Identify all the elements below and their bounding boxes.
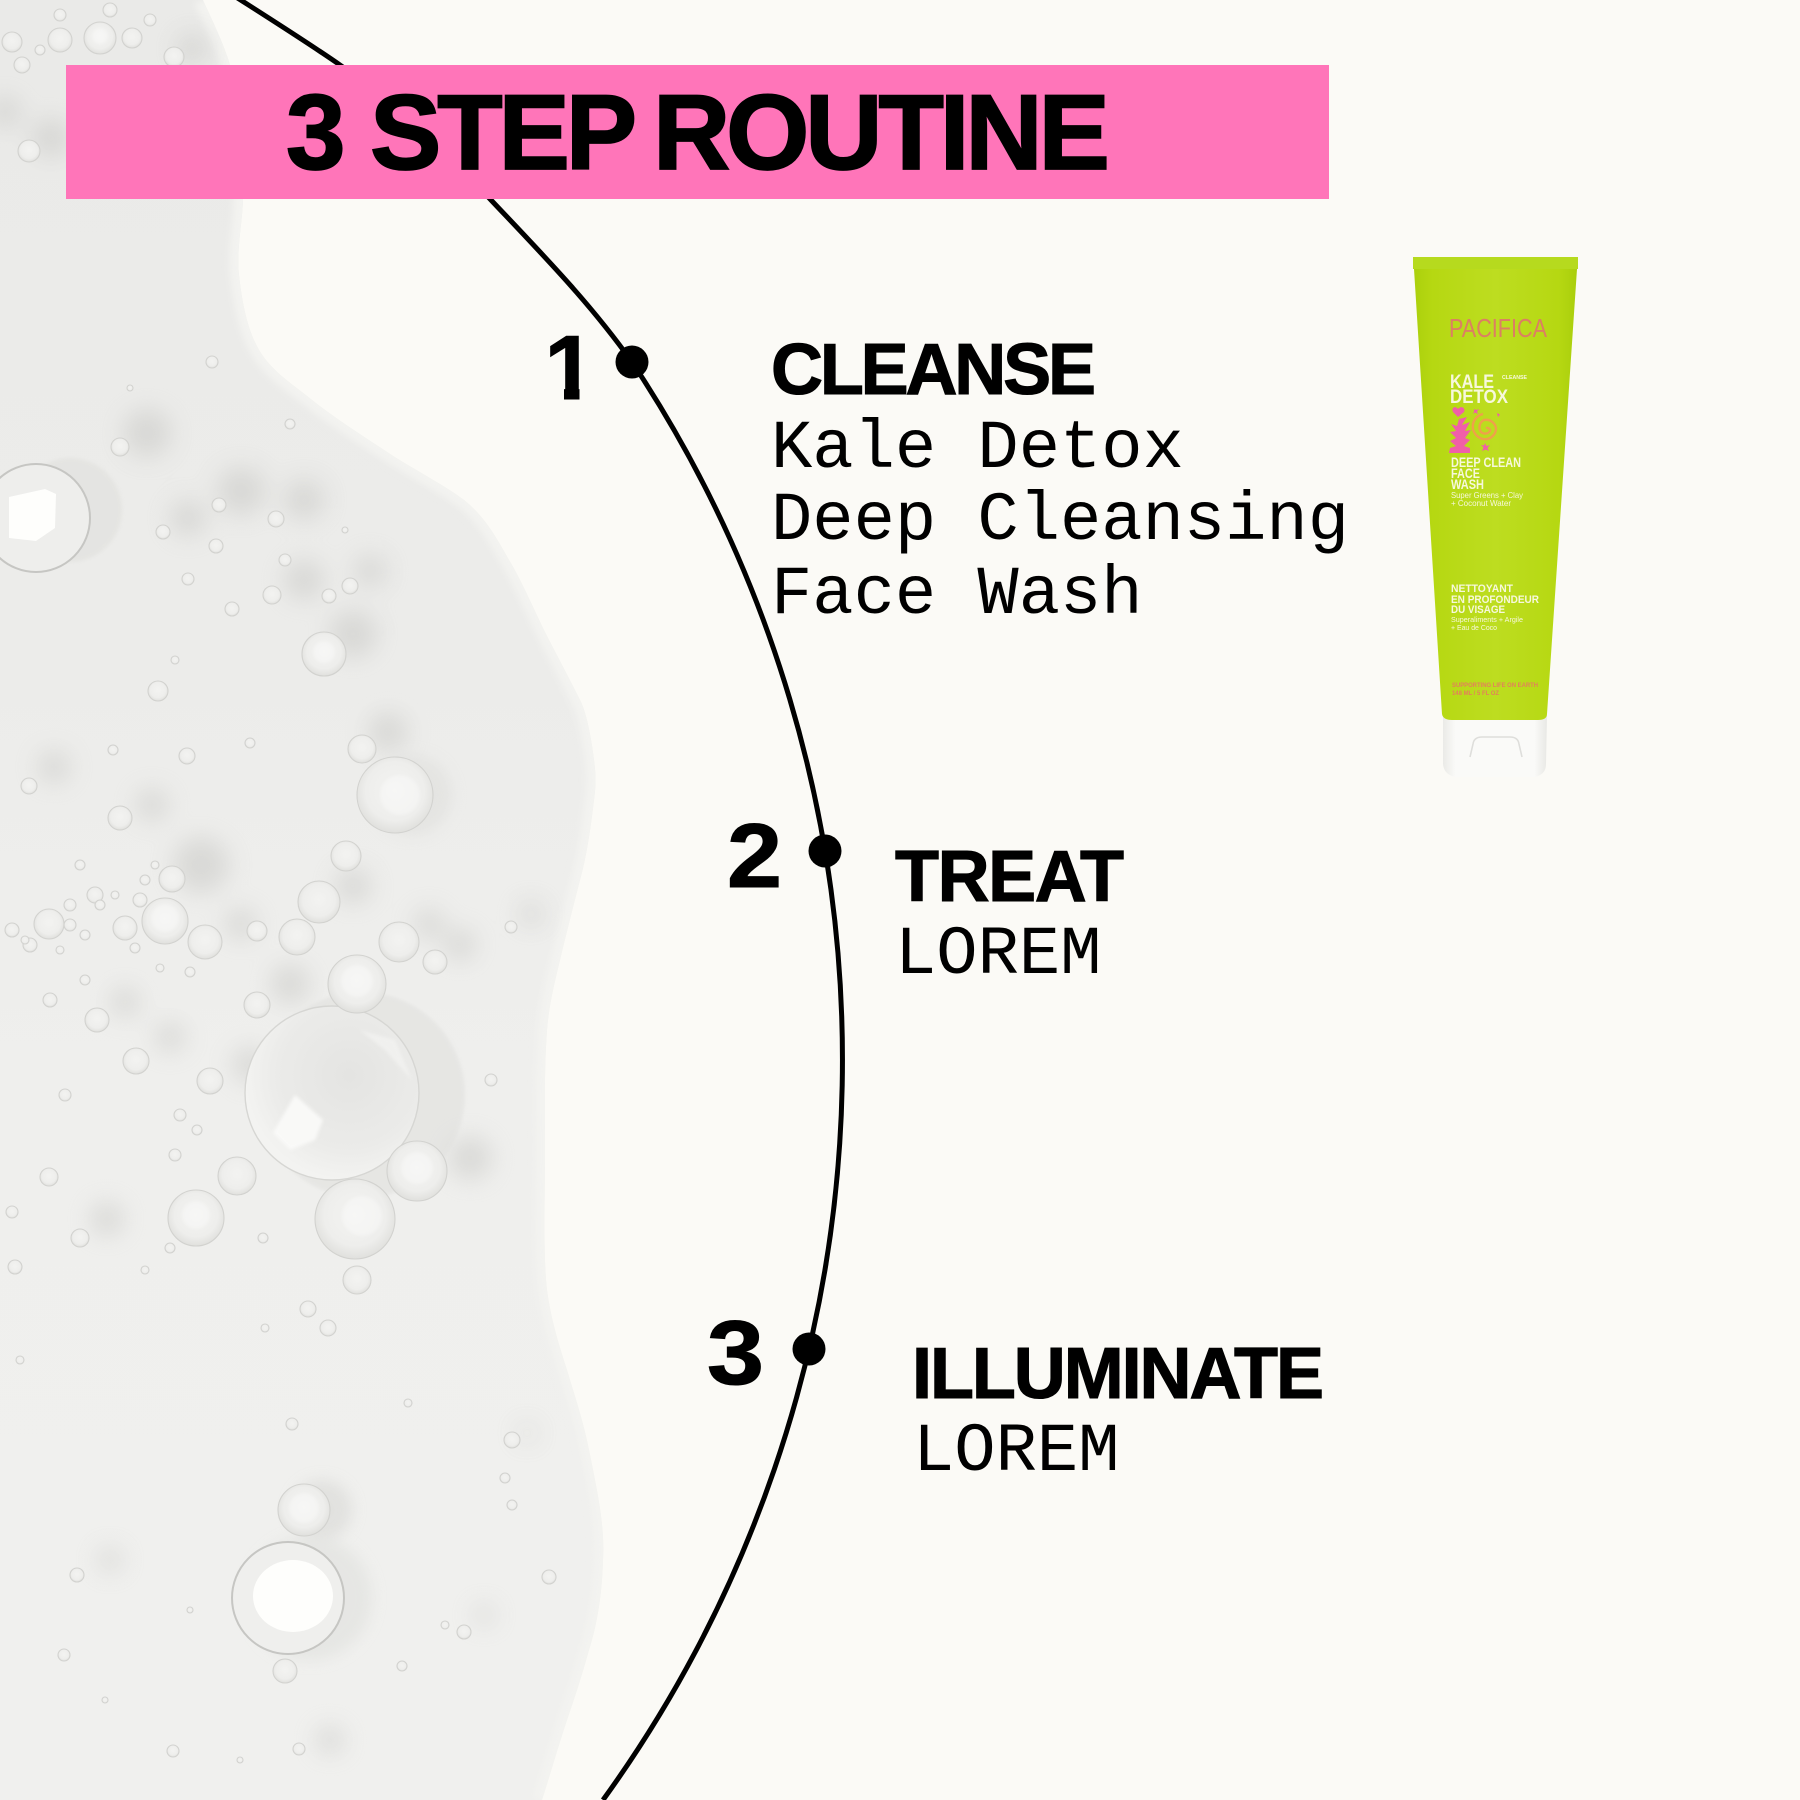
product name: DETOX — [1450, 386, 1508, 408]
foam texture blob with bubbles — [0, 0, 620, 1800]
French ingredients: + Eau de Coco — [1451, 623, 1497, 632]
step number 2: 2 — [727, 806, 782, 907]
step number 1: 1 — [544, 318, 595, 419]
step 3 heading: ILLUMINATE — [912, 1334, 1324, 1414]
step 2 heading: TREAT — [895, 837, 1124, 917]
step 1: cleanse — [550, 336, 1344, 614]
timeline dot 1 — [616, 346, 648, 378]
title banner — [66, 65, 1329, 199]
step 1 heading: CLEANSE — [771, 330, 1096, 410]
title: ROUTINE — [653, 72, 1107, 192]
product description: DEEP CLEAN — [1451, 455, 1521, 470]
French ingredients — [1451, 615, 1523, 632]
product name — [1450, 371, 1527, 408]
step 3: illuminate — [707, 1303, 1324, 1491]
ingredients: + Coconut Water — [1451, 499, 1511, 508]
brand name: PACIFICA — [1449, 313, 1548, 343]
tagline and size — [1452, 682, 1538, 697]
tube body — [1413, 257, 1578, 720]
bottom large bubble — [232, 1484, 344, 1683]
crimped end — [1413, 257, 1578, 269]
product name: KALE — [1450, 371, 1494, 393]
product description: WASH — [1451, 477, 1484, 492]
big bubble — [245, 1006, 419, 1180]
bubble highlights — [92, 28, 433, 1523]
title: 3 — [286, 72, 342, 192]
product tube: Pacifica Kale Detox face wash — [1413, 257, 1578, 777]
title: STEP — [370, 72, 634, 192]
step number 3: 3 — [707, 1303, 764, 1404]
curved timeline line — [225, 0, 842, 1800]
step 1 description: Deep Cleansing — [771, 482, 1349, 560]
step 2 description: LOREM — [895, 916, 1101, 994]
product name: CLEANSE — [1502, 375, 1527, 381]
French ingredients: Superaliments + Argile — [1451, 615, 1523, 624]
icon: orange spiral — [1473, 414, 1496, 439]
medium and small bubbles — [2, 3, 556, 1763]
step 1 description — [771, 410, 1349, 634]
tube cap — [1443, 716, 1547, 777]
step 1 description: Kale Detox — [771, 410, 1184, 488]
product description — [1451, 455, 1521, 492]
top left large bubble — [0, 464, 90, 572]
timeline dot 3 — [792, 1332, 826, 1366]
step 2: treat — [727, 806, 1124, 994]
French product description — [1451, 583, 1539, 616]
tagline and size: SUPPORTING LIFE ON EARTH — [1452, 682, 1538, 689]
step 1 description: Face Wash — [771, 556, 1143, 634]
French product description: NETTOYANT — [1451, 583, 1513, 595]
timeline dot 2 — [808, 834, 842, 868]
step 3 description: LOREM — [913, 1413, 1119, 1491]
ingredients — [1451, 491, 1524, 508]
tagline and size: 148 ML / 5 FL OZ — [1452, 690, 1499, 697]
French product description: DU VISAGE — [1451, 604, 1505, 616]
ingredients: Super Greens + Clay — [1451, 491, 1524, 500]
French product description: EN PROFONDEUR — [1451, 594, 1539, 606]
product description: FACE — [1451, 466, 1480, 481]
icon: pink leaf, heart and stars — [1449, 407, 1500, 453]
